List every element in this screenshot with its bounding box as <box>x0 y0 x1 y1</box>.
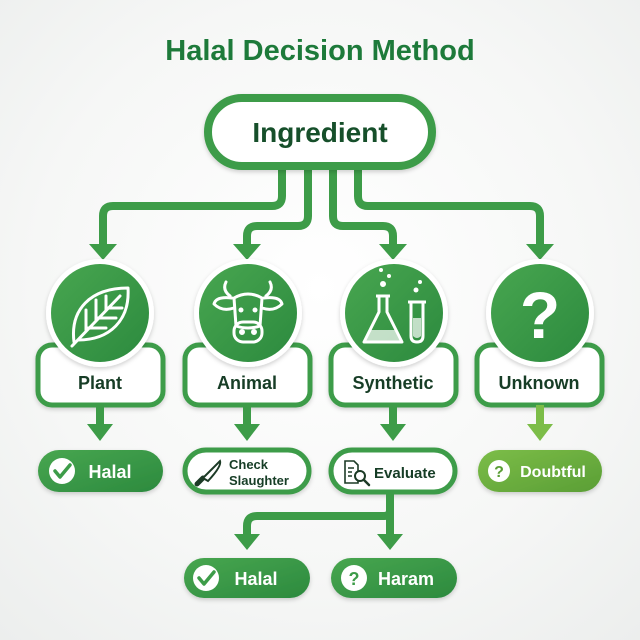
result: evaluate <box>331 450 455 492</box>
icon: cow <box>214 282 282 342</box>
ingredient pill <box>208 98 432 166</box>
icon: knife <box>197 478 203 484</box>
arrows: category to result <box>87 405 553 441</box>
connector: evaluate to final outcomes <box>234 492 403 550</box>
final: halal <box>184 558 310 598</box>
panel: plant <box>38 259 163 405</box>
connectors: ingredient to categories <box>103 168 540 246</box>
result: doubtful <box>478 450 602 492</box>
icon: flask <box>364 296 426 342</box>
arrowheads <box>89 244 554 260</box>
panel: unknown: Unknown <box>498 373 580 393</box>
result: doubtful: Doubtful <box>520 464 586 481</box>
final: haram: Haram <box>378 569 434 589</box>
panel: plant: Plant <box>78 373 122 393</box>
result: evaluate: Evaluate <box>374 465 436 482</box>
panel: unknown <box>477 259 602 405</box>
result: halal (plant): Halal <box>88 462 132 482</box>
result: check slaughter: Check <box>229 457 269 472</box>
panel: animal <box>185 259 310 405</box>
result: check slaughter: Slaughter <box>229 473 289 488</box>
icon: question mark: ? <box>520 278 560 352</box>
ingredient pill: Ingredient <box>252 117 388 148</box>
title: Halal Decision Method <box>165 35 475 67</box>
result: halal (plant) <box>38 450 163 492</box>
final: haram <box>331 558 457 598</box>
panel: synthetic <box>331 259 456 405</box>
final: haram: ? <box>348 569 360 589</box>
icon: leaf <box>72 288 128 346</box>
panel: animal: Animal <box>217 373 277 393</box>
final: halal: Halal <box>234 569 278 589</box>
result: check slaughter <box>185 450 309 492</box>
result: doubtful: ? <box>494 464 504 481</box>
panel: synthetic: Synthetic <box>352 373 434 393</box>
icon: document search <box>345 461 358 483</box>
